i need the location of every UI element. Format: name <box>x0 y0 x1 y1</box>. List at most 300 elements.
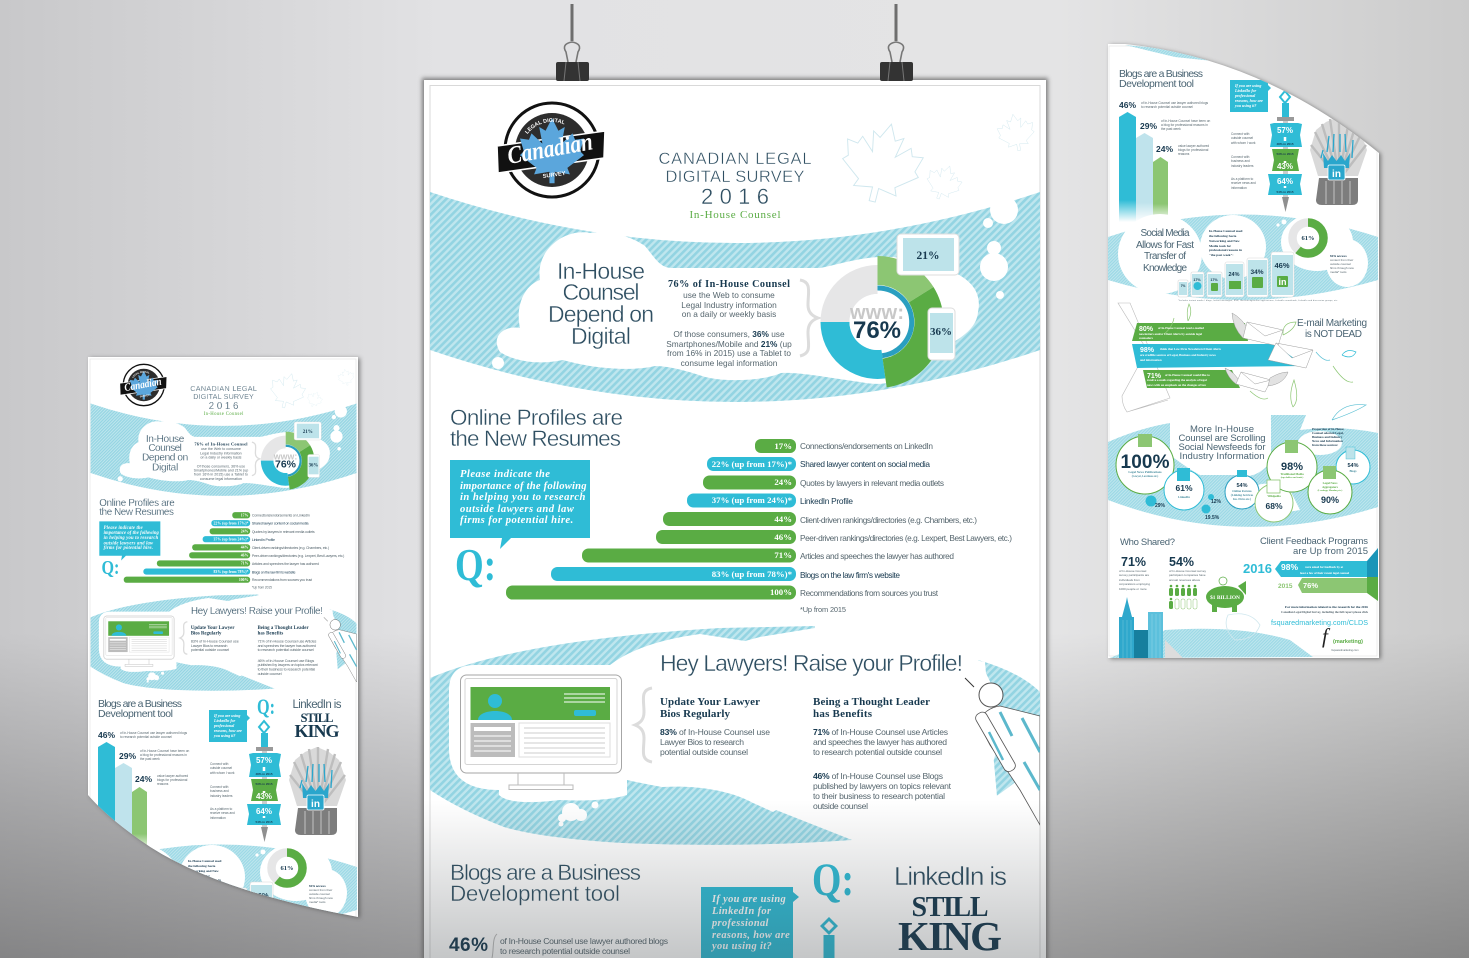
social intro text: the following Socia <box>1209 234 1237 238</box>
brace <box>635 688 652 762</box>
bar chart: Quotes by lawyers in relevant media outlets <box>800 478 944 488</box>
logo: f marketing: (marketing) <box>1333 639 1363 645</box>
left poster top part: Being a Thought Leader <box>258 626 309 631</box>
blog stats and labels: of In-House Counsel have been on <box>1161 119 1210 123</box>
column: update your lawyer bios: Update Your Lawyer <box>660 696 760 708</box>
question text: in helping you to research <box>460 492 586 503</box>
left poster top part: SURVEY <box>140 394 150 398</box>
blog stats and labels: Connect with <box>1231 155 1250 159</box>
left poster lower part: Development tool <box>98 708 173 720</box>
question text: professional <box>711 918 769 929</box>
panel: social newsfeeds <box>1108 415 1378 527</box>
bar chart: Recommendations from sources you trust <box>800 588 939 598</box>
column: thought leader: and speeches the lawyer has authored <box>813 737 947 747</box>
left poster lower part: outside counsel <box>210 766 232 770</box>
blog stats and labels: to research potential outside counsel <box>1141 105 1193 109</box>
left poster lower part: 57% <box>256 756 272 765</box>
left poster lower part: Networking and New <box>188 869 219 873</box>
left poster lower part: As a platform to <box>210 807 233 811</box>
newsfeeds heading: More In-House <box>1190 424 1254 435</box>
heading: Blogs are a Business <box>1119 68 1203 80</box>
left poster lower part: In-House Counsel used <box>188 859 221 863</box>
sources text: Counsel selected Legal, <box>1312 431 1344 435</box>
donut chart <box>820 256 944 387</box>
left poster lower part: Q: <box>257 694 275 719</box>
donut labels: 76% <box>853 317 901 344</box>
hero text block: from 16% in 2015) use a Tablet to <box>667 348 791 358</box>
donut 61% <box>1292 222 1324 254</box>
bar chart: LinkedIn Profile <box>800 496 853 506</box>
banner 2016: 98% <box>1281 562 1298 572</box>
social intro text: Networking and New <box>1209 239 1240 243</box>
left poster lower part: Connect with <box>210 785 229 789</box>
donut labels: 21% <box>916 250 940 262</box>
hero text block: 76% of In-House Counsel <box>668 279 790 290</box>
newsfeeds heading: Social Newsfeeds for <box>1178 442 1266 453</box>
blog stats and labels: 46% <box>1119 100 1136 110</box>
question text: If you are using <box>1234 83 1261 88</box>
bar chart: Client-driven rankings/directories (e.g. Chambers, etc.) <box>800 515 977 525</box>
left poster lower part: Allows for Fast <box>115 870 173 881</box>
left poster lower part: Social Media <box>120 858 169 869</box>
left poster top part: Smartphones/Mobile and 21% (up <box>194 469 248 473</box>
question text: Please indicate the <box>460 469 550 480</box>
left poster top part: importance of the following <box>104 531 160 536</box>
left poster top part: from 16% in 2015) use a Tablet to <box>194 473 248 477</box>
panel: skyline and map <box>1110 597 1363 658</box>
email stat text: counselors <box>1139 336 1154 340</box>
source names: LinkedIn <box>1178 495 1190 499</box>
question text: If you are using <box>711 894 786 905</box>
email stat text: and information <box>1140 358 1162 362</box>
heading: Blogs are a Business <box>450 860 641 885</box>
left poster lower part: Media tools for <box>188 874 211 878</box>
left poster top part: 24% <box>241 529 249 533</box>
left poster lower part: receive news and <box>210 811 235 815</box>
bar chart: Articles and speeches the lawyer has authored <box>800 551 954 561</box>
Q letter: Q: <box>812 854 854 906</box>
icon: people <box>1169 585 1197 609</box>
panel: who shared: Who Shared? <box>1120 537 1175 548</box>
hero text block: consume legal information <box>681 358 778 368</box>
arrow bars <box>1119 112 1168 222</box>
newsfeeds numbers: 90% <box>1321 495 1339 505</box>
icon: map outline <box>1226 614 1260 640</box>
left poster top part: In-House Counsel <box>204 412 244 417</box>
left poster top part: 100% <box>239 578 249 582</box>
left poster top part: *Up from 2015 <box>252 585 272 589</box>
banner 2015: 2015 <box>1278 583 1293 590</box>
icon: phone <box>928 308 955 360</box>
panel: blogs and LinkedIn <box>449 854 1007 958</box>
left poster top part: 17% <box>241 514 249 518</box>
social intro text: Media tools for <box>1209 244 1232 248</box>
heading <box>450 409 622 446</box>
left poster lower part: 61% access <box>309 884 326 888</box>
logo wording: Canadian <box>505 128 595 170</box>
banner numbers: in <box>1332 169 1341 180</box>
white thought cloud <box>449 628 1000 838</box>
left poster lower part: business and <box>210 789 229 793</box>
banner 2016: were asked for feedback by at <box>1305 565 1343 569</box>
heading: Development tool <box>1119 78 1194 90</box>
band remnant at the top <box>1125 45 1222 62</box>
newsfeeds numbers: 68% <box>1265 501 1283 511</box>
left poster top part: DIGITAL SURVEY <box>193 392 254 401</box>
icon: piggy bank: $1 BILLION <box>1210 594 1240 601</box>
blog stats and labels: blogs for professional <box>1178 148 1209 152</box>
Q letter: Q: <box>455 539 496 590</box>
left poster top part: consume legal information <box>200 477 242 481</box>
left poster lower part: the past week <box>140 757 160 761</box>
heading: Online Profiles are <box>450 405 623 430</box>
stat: 46%: of In-House Counsel use lawyer authored blogs <box>500 936 668 946</box>
left poster <box>87 355 363 920</box>
column: thought leader: has Benefits <box>813 708 873 720</box>
hero heading: Counsel <box>562 279 640 305</box>
column: update your lawyer bios: Lawyer Bios to research <box>660 737 744 747</box>
left poster top part <box>90 364 357 691</box>
logo: f marketing: f <box>1322 624 1331 648</box>
question text: reasons, how are <box>712 930 790 941</box>
left poster top part: 21% <box>303 430 313 435</box>
blog stats and labels: with whom I work <box>1231 141 1256 145</box>
icon: sword <box>820 917 838 958</box>
left poster lower part: content from their <box>309 888 332 892</box>
panel: client feedback: Client Feedback Programs <box>1260 536 1368 547</box>
left poster top part: Digital <box>152 462 178 473</box>
banner 2015 <box>1278 577 1378 601</box>
left poster top part: Online Profiles are <box>99 498 175 509</box>
bar chart <box>506 439 1012 614</box>
social stats: 61% access <box>1330 254 1347 258</box>
left poster top part: Quotes by lawyers in relevant media outlets <box>252 530 315 534</box>
question text <box>710 894 790 952</box>
brace <box>800 280 818 356</box>
question text <box>460 469 587 526</box>
blog stats and labels: As a platform to <box>1231 177 1254 181</box>
newsfeeds numbers <box>1120 452 1359 521</box>
newsfeeds numbers: 61% <box>1175 483 1193 493</box>
social stats: 34% <box>1250 269 1264 276</box>
left poster top part: Lawyer Bios to research <box>191 644 227 648</box>
bar chart: Connections/endorsements on LinkedIn <box>800 441 933 451</box>
banner numbers: 48% in 2015 <box>1276 142 1294 146</box>
left poster top part: 46% <box>241 554 249 558</box>
banner 2015: 76% <box>1303 581 1318 590</box>
question text: LinkedIn for <box>1234 88 1257 93</box>
left poster lower part: to research potential outside counsel <box>120 735 172 739</box>
source icons <box>1138 434 1355 514</box>
column: thought leader: Being a Thought Leader <box>813 696 930 708</box>
left poster lower part: 61% <box>280 865 294 872</box>
left poster lower part: STILL <box>300 711 334 725</box>
left poster top part: Connections/endorsements on LinkedIn <box>252 514 310 518</box>
email stat text: 71% <box>1147 373 1162 380</box>
left poster top part: 44% <box>241 546 249 550</box>
Q letter and LinkedIn heading: KING <box>1316 91 1360 111</box>
bar chart: Shared lawyer content on social media <box>800 459 930 469</box>
left poster top part: 71% <box>241 562 249 566</box>
left poster top part: use the Web to consume <box>201 447 241 451</box>
email stat text: 80% <box>1139 326 1154 333</box>
email stat text: 98% <box>1140 347 1155 354</box>
banner teal 98% <box>1132 344 1305 368</box>
left poster top part: Depend on <box>142 453 188 464</box>
stat: 46%: to research potential outside counsel <box>500 946 630 956</box>
band <box>1108 415 1378 527</box>
Q letter and LinkedIn heading: STILL <box>1322 81 1354 95</box>
title: In-House Counsel <box>690 209 780 221</box>
question text: LinkedIn for <box>711 906 772 917</box>
Q letter and LinkedIn heading: Q: <box>1278 64 1296 89</box>
banner numbers <box>1276 126 1341 194</box>
social intro text: In-House Counsel used <box>1209 229 1242 233</box>
left poster lower part: 29% <box>119 751 136 761</box>
email stat text: news with an emphasis on the changes of law <box>1147 383 1207 387</box>
stat: 54%: of In-House Counsel survey <box>1169 569 1207 573</box>
heading <box>1119 68 1203 90</box>
profile heading: Hey Lawyers! Raise your Profile! <box>660 650 963 676</box>
left poster top part: 76% <box>275 459 297 471</box>
bar chart: 100% <box>770 587 792 597</box>
column: thought leader <box>813 696 952 811</box>
left poster top part: 46% of In-House Counsel use Blogs <box>258 659 314 663</box>
question box <box>1230 80 1271 112</box>
title: CANADIAN LEGAL <box>658 150 812 168</box>
Q letter and LinkedIn heading <box>1278 64 1363 111</box>
left poster lower part: with whom I work <box>210 771 235 775</box>
banner numbers: 57% <box>1277 126 1293 135</box>
question box <box>450 460 590 549</box>
heading: the New Resumes <box>450 426 621 451</box>
banner numbers: 53% in 2015 <box>1276 152 1294 156</box>
hatched band <box>430 192 1040 402</box>
left poster top part: the New Resumes <box>99 507 174 518</box>
question text: importance of the following <box>460 481 587 492</box>
stat: 54%: 54% <box>1169 555 1194 569</box>
left poster lower part: KING <box>294 721 340 741</box>
left poster lower part: reasons <box>157 782 169 786</box>
heading: Development tool <box>450 881 620 906</box>
bar chart: *Up from 2015 <box>800 605 846 614</box>
hero heading: In-House <box>557 258 645 284</box>
phones bar chart <box>1178 252 1294 297</box>
left poster top part: published by lawyers on topics relevant <box>258 663 319 667</box>
left poster lower part: you using it? <box>213 733 235 738</box>
left poster lower part: professional <box>213 723 235 728</box>
email stat text: of In-House Counsel read e-mailed <box>1158 326 1204 330</box>
banner 2016: least a few of their recent legal counsel <box>1300 571 1349 575</box>
more information <box>1271 605 1368 627</box>
left poster top part: Hey Lawyers! Raise your Profile! <box>191 606 323 617</box>
icon: laptop outline <box>1118 303 1170 412</box>
question text: professional <box>1234 93 1256 98</box>
left poster top part: Peer-driven rankings/directories (e.g. Lexpert, Best Lawyers, etc.) <box>252 554 344 558</box>
heading: LinkedIn is still king: STILL <box>912 892 988 923</box>
right poster <box>1106 42 1382 660</box>
social intro text <box>1209 229 1242 257</box>
email stat text: are credible sources of Legal, Business and Industry news <box>1140 353 1217 357</box>
left poster lower part: Blogs are a Business <box>98 698 182 710</box>
left poster top part: Client-driven rankings/directories (e.g. Chambers, etc.) <box>252 546 329 550</box>
left poster lower part: outside counsel <box>309 892 330 896</box>
social stats: outside counsel <box>1330 262 1351 266</box>
left poster lower part: 43% <box>256 792 272 801</box>
chart circles <box>1116 436 1370 522</box>
icon: skyline <box>1119 597 1183 658</box>
source names: Aggregators <box>1322 485 1339 489</box>
donut labels: www: <box>849 302 904 324</box>
source names: Legal News <box>1323 481 1338 485</box>
panel: header <box>498 102 1034 218</box>
left poster top part: has Benefits <box>258 631 283 636</box>
hero text block: Smartphones/Mobile and 21% (up <box>666 339 792 349</box>
logo wording <box>508 118 593 178</box>
social stats: content from their <box>1330 258 1353 262</box>
left poster top part: to their business to research potential <box>258 668 315 672</box>
left poster lower part: a blog for professional reasons in <box>140 753 187 757</box>
cloud <box>492 196 1018 384</box>
blog stats and labels: Connect with <box>1231 132 1250 136</box>
left poster top part: Counsel <box>148 443 182 454</box>
email heading: E-mail Marketing <box>1297 318 1367 329</box>
title: 2016 <box>701 184 769 209</box>
column: update your lawyer bios: potential outside counsel <box>660 747 748 757</box>
sources text: Proportion of In-House <box>1312 427 1344 431</box>
left poster lower part: value lawyer authored <box>157 774 188 778</box>
sources text: Business and Industry <box>1312 435 1343 439</box>
panel: social media <box>1108 213 1378 302</box>
column: update your lawyer bios <box>660 696 770 757</box>
panel: client feedback: are Up from 2015 <box>1293 546 1368 557</box>
left poster top part: 36% <box>309 463 318 468</box>
source names: (Lexology, Mondaq etc.) <box>1318 489 1343 492</box>
newsfeeds heading <box>1178 424 1266 462</box>
left poster lower part: 54% in 2015 <box>255 820 273 824</box>
left poster lower part: reasons, how are <box>214 728 242 733</box>
icon: binder clip left <box>556 4 589 81</box>
panel: in-house counsel depend on digital <box>430 192 1040 402</box>
left poster top part: 22% (up from 17%)* <box>214 521 248 525</box>
question box <box>701 887 799 958</box>
left poster lower part: Knowledge <box>122 893 166 904</box>
left poster top part: LEGAL DIGITAL <box>132 371 150 378</box>
icon: maple leaf outlines <box>834 111 1037 211</box>
left poster top part: outside counsel <box>258 672 282 676</box>
sources text: News and Information <box>1312 439 1343 443</box>
source names: Blogs <box>1349 469 1357 473</box>
source names: (top dailies and trade) <box>1281 476 1303 479</box>
left poster lower part: industry leaders <box>210 794 233 798</box>
social heading <box>1136 228 1194 274</box>
social stats: 46% <box>1274 261 1290 270</box>
social stats: 17% <box>1193 278 1201 282</box>
social stats: 17% <box>1210 278 1218 282</box>
blog stats and labels: business and <box>1231 159 1250 163</box>
stat: 71%: survey participants are <box>1119 573 1150 577</box>
title: DIGITAL SURVEY <box>666 168 804 186</box>
left poster lower part: Connect with <box>210 762 229 766</box>
stat: 54%: annual revenues above <box>1169 578 1201 582</box>
heading <box>452 864 640 906</box>
icon: business figure <box>965 678 1040 825</box>
main poster <box>419 75 1051 958</box>
left poster top part: on a daily or weekly basis <box>200 455 242 459</box>
left poster lower part: 64% <box>256 807 272 816</box>
stat: 46%: 46% <box>449 935 488 956</box>
newsfeeds numbers: 29% <box>1155 503 1166 509</box>
left poster top part: Recommendations from sources you trust <box>252 578 312 582</box>
left poster top part: Of those consumers, 36% use <box>197 464 245 468</box>
question text: you using it? <box>710 941 772 952</box>
title <box>658 150 812 221</box>
hero heading: Depend on <box>548 301 654 327</box>
bar chart: 83% (up from 78%)* <box>712 569 793 579</box>
blog stats and labels: value lawyer authored <box>1178 144 1209 148</box>
left poster lower part: information <box>210 816 226 820</box>
left poster top part: to research potential outside counsel <box>258 648 314 652</box>
social intro text: professional reasons in <box>1209 248 1242 252</box>
banner numbers: 64% <box>1277 177 1293 186</box>
panel: raise your profile <box>430 626 1040 845</box>
donut labels: 36% <box>930 326 952 338</box>
newsfeeds numbers: 54% <box>1236 483 1248 489</box>
clouds <box>1118 213 1368 294</box>
left poster lower part: 24% <box>207 902 219 908</box>
left poster lower part <box>87 694 357 930</box>
left poster top part: Articles and speeches the lawyer has authored <box>252 562 319 566</box>
left poster top part: 83% (up from 78%)* <box>214 570 248 574</box>
left poster lower part: 24% <box>135 774 152 784</box>
social heading: Social Media <box>1140 228 1190 239</box>
source names: (Lawyer, Lawtimes etc.) <box>1132 475 1158 478</box>
source names: (Linking Services <box>1231 493 1254 497</box>
sources text: from these sources: <box>1312 443 1338 447</box>
social stats <box>1178 235 1355 302</box>
hero text block: on a daily or weekly basis <box>682 309 776 319</box>
left poster lower part: "the past week": <box>188 883 212 887</box>
banner green 71% <box>1143 370 1240 388</box>
hero text block: use the Web to consume <box>683 290 775 300</box>
icon: tablet <box>897 234 959 275</box>
newsfeeds numbers: 54% <box>1347 463 1359 469</box>
social stats: media* tools <box>1330 270 1347 274</box>
question text: you using it? <box>1234 103 1256 108</box>
question text: firms for potential hire. <box>460 515 574 526</box>
panel: who shared <box>1119 537 1246 612</box>
band <box>1108 214 1378 300</box>
left poster top part: In-House <box>146 434 185 445</box>
blog stats and labels: 24% <box>1156 144 1173 154</box>
blog stats and labels: outside counsel <box>1231 136 1253 140</box>
more information: Canadian Legal Digital Survey, including the full report please click <box>1281 610 1368 614</box>
column: update your lawyer bios: 83% of In-House Counsel use <box>660 727 770 737</box>
left poster lower part: of In-House Counsel have been on <box>140 749 189 753</box>
column: thought leader: outside counsel <box>813 801 868 811</box>
stat: 71%: corporations employing <box>1119 582 1150 586</box>
source names: Legal News Publications <box>1128 470 1162 474</box>
left poster top part: and speeches the lawyer has authored <box>258 644 316 648</box>
stat: 54%: participant companies have <box>1169 573 1206 577</box>
newsfeeds numbers: 12% <box>1211 499 1222 505</box>
left poster lower part: of In-House Counsel use lawyer authored blogs <box>120 731 188 735</box>
column: thought leader: 71% of In-House Counsel use Articles <box>813 727 948 737</box>
source names: Wikipedia <box>1267 494 1281 498</box>
heading: LinkedIn is still king: KING <box>898 913 1002 958</box>
stat: 46% <box>449 934 668 958</box>
left poster top part: outside lawyers and law <box>104 541 154 546</box>
